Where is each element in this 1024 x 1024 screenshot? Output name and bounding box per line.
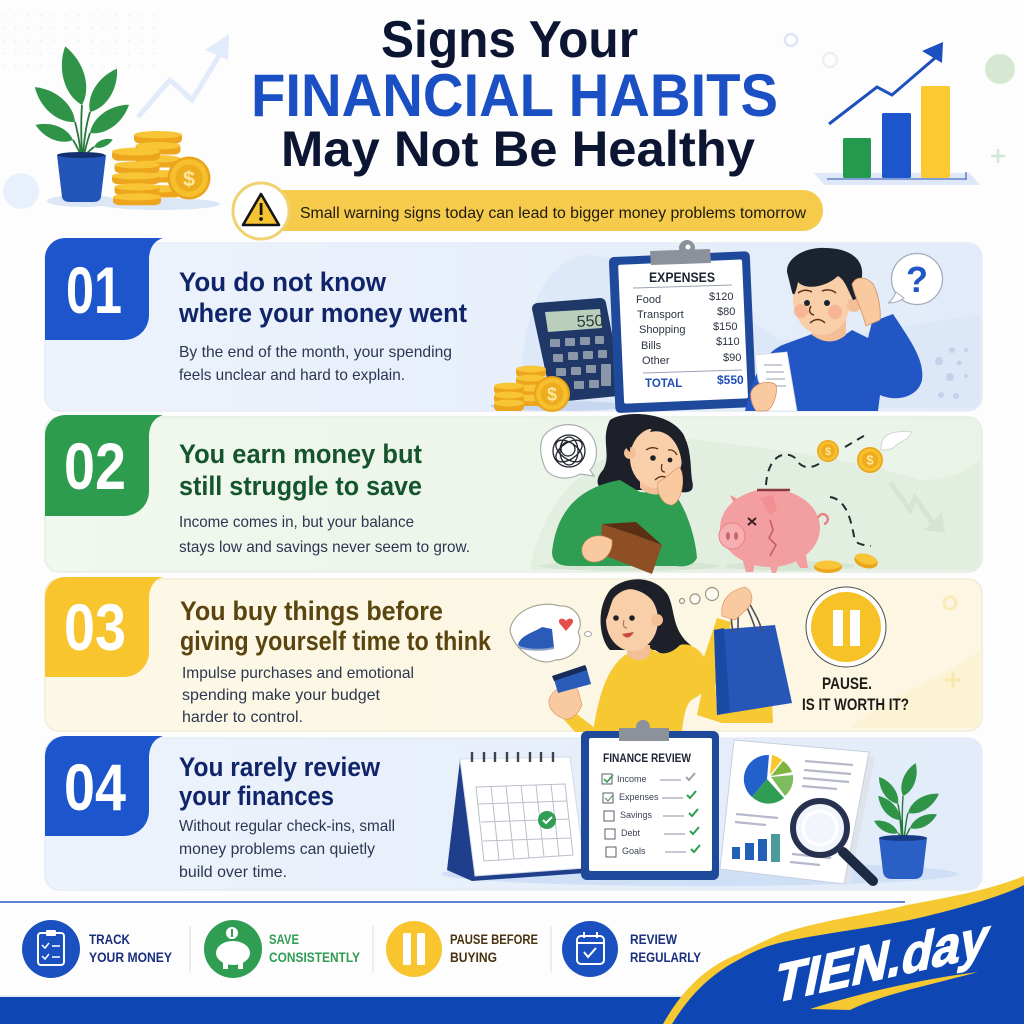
heading 02: still struggle to save [179,471,422,501]
illustration: expenses clipboard: $550 [717,373,744,387]
logo swoosh [663,876,1024,1024]
heading 01: You do not know [179,267,387,297]
icon: coin stacks [494,366,570,412]
body text 03: harder to control. [182,709,303,726]
body text 01 [179,344,452,384]
footer strip [0,876,1024,1024]
icon: question bubble: ? [906,259,928,300]
panel: sign 02 [45,414,982,574]
illustration: finance review clipboard: Debt [621,828,641,838]
illustration: expenses clipboard: $80 [717,306,735,318]
warning banner: Small warning signs today can lead to bigger money problems tomorrow [300,205,806,222]
icon: thought circles [680,588,718,604]
heading 03: You buy things before [180,596,443,626]
body text 01: feels unclear and hard to explain. [179,367,405,384]
illustration: expenses clipboard: $110 [716,336,740,348]
illustration: expenses clipboard [609,240,756,413]
heading 02: You earn money but [179,439,422,469]
illustration: desk calendar [447,752,598,881]
number badge 01 [45,238,163,340]
icon: flying coins [766,432,945,573]
illustration: expenses clipboard: Bills [641,340,662,352]
heading 04 [179,752,381,811]
illustration: finance review clipboard: Income [617,774,647,784]
body text 04: build over time. [179,864,287,881]
heading 02 [179,439,422,501]
illustration: report with magnifier [720,740,875,884]
icon: pause sign: IS IT WORTH IT? [802,695,909,714]
heading 04: You rarely review [179,752,381,782]
illustration: worried woman with wallet [540,414,720,574]
footer tip: track your money [22,920,172,978]
illustration: finance review clipboard: Expenses [619,792,659,802]
number badge 02: 02 [64,429,126,503]
body text 02 [179,514,470,556]
body text 02: Income comes in, but your balance [179,514,414,531]
illustration: woman with shopping bags [549,579,792,732]
illustration: calculator: 550 [576,313,604,331]
illustration: finance review clipboard [581,720,719,880]
panel: sign 04 [45,720,982,890]
footer tip: save consistently: SAVE [269,932,299,947]
heading 01 [178,267,467,328]
body text 03 [182,665,414,726]
footer tip: pause before buying [386,921,538,977]
number badge 03: 03 [64,590,126,664]
icon: rising bar chart [814,42,980,185]
body text 04: Without regular check-ins, small [179,818,395,835]
icon: question bubble [888,254,942,304]
illustration: expenses clipboard: Food [636,294,661,306]
title [251,11,778,177]
illustration: finance review clipboard: Savings [620,810,653,820]
illustration: finance review clipboard: FINANCE REVIEW [603,753,691,765]
number badge 02 [45,415,163,516]
footer tip: review regularly [562,921,701,977]
illustration: expenses clipboard: $120 [709,291,733,303]
panel: sign 03 [45,577,982,732]
pie chart [744,755,793,804]
body text 03: spending make your budget [182,687,381,704]
icon: plant with coins [29,34,229,210]
body text 03: Impulse purchases and emotional [182,665,414,682]
footer tip: review regularly: REGULARLY [630,950,701,965]
footer tip: save consistently: CONSISTENTLY [269,950,360,965]
icon: potted plant [872,761,942,879]
footer tip: track your money: TRACK [89,932,130,947]
body text 01: By the end of the month, your spending [179,344,452,361]
illustration: expenses clipboard: $90 [723,352,741,364]
footer tip: pause before buying: BUYING [450,950,497,965]
panel: sign 01 [45,238,982,413]
footer tip: review regularly: REVIEW [630,932,677,947]
illustration: finance review clipboard: Goals [622,846,646,856]
illustration: expenses clipboard: Other [642,355,670,367]
footer tip: pause before buying: PAUSE BEFORE [450,932,538,947]
heading 03: giving yourself time to think [180,626,492,656]
number badge 01: 01 [66,253,122,327]
title: Signs Your [381,11,638,69]
illustration: expenses clipboard: $150 [713,321,737,333]
icon: warning triangle [243,194,279,225]
number badge 03 [45,577,163,677]
title: FINANCIAL HABITS [251,62,778,129]
heading 01: where your money went [178,298,467,328]
icon: pause sign [802,587,909,714]
number badge 04 [45,736,163,836]
icon: shoe thought bubble [510,604,592,662]
illustration: expenses clipboard: Shopping [639,324,686,336]
illustration: expenses clipboard: TOTAL [645,378,682,390]
title: May Not Be Healthy [281,121,755,177]
illustration: calculator [490,298,630,411]
body text 04: money problems can quietly [179,841,375,858]
footer tip: save consistently [204,920,360,978]
footer tip: track your money: YOUR MONEY [89,950,172,965]
number badge 04: 04 [64,750,126,824]
illustration: confused man [745,248,922,411]
heading 04: your finances [179,781,334,811]
illustration: expenses clipboard: EXPENSES [649,270,715,285]
warning banner [233,183,823,239]
body text 02: stays low and savings never seem to grow. [179,539,470,556]
icon: pause sign: PAUSE. [822,674,872,693]
heading 03 [180,596,492,656]
body text 04 [179,818,395,881]
illustration: cracked piggy bank [719,489,855,573]
icon: tangled thought bubble [541,425,597,478]
logo swoosh: TIEN.day [770,906,996,1015]
illustration: expenses clipboard: Transport [637,309,684,321]
